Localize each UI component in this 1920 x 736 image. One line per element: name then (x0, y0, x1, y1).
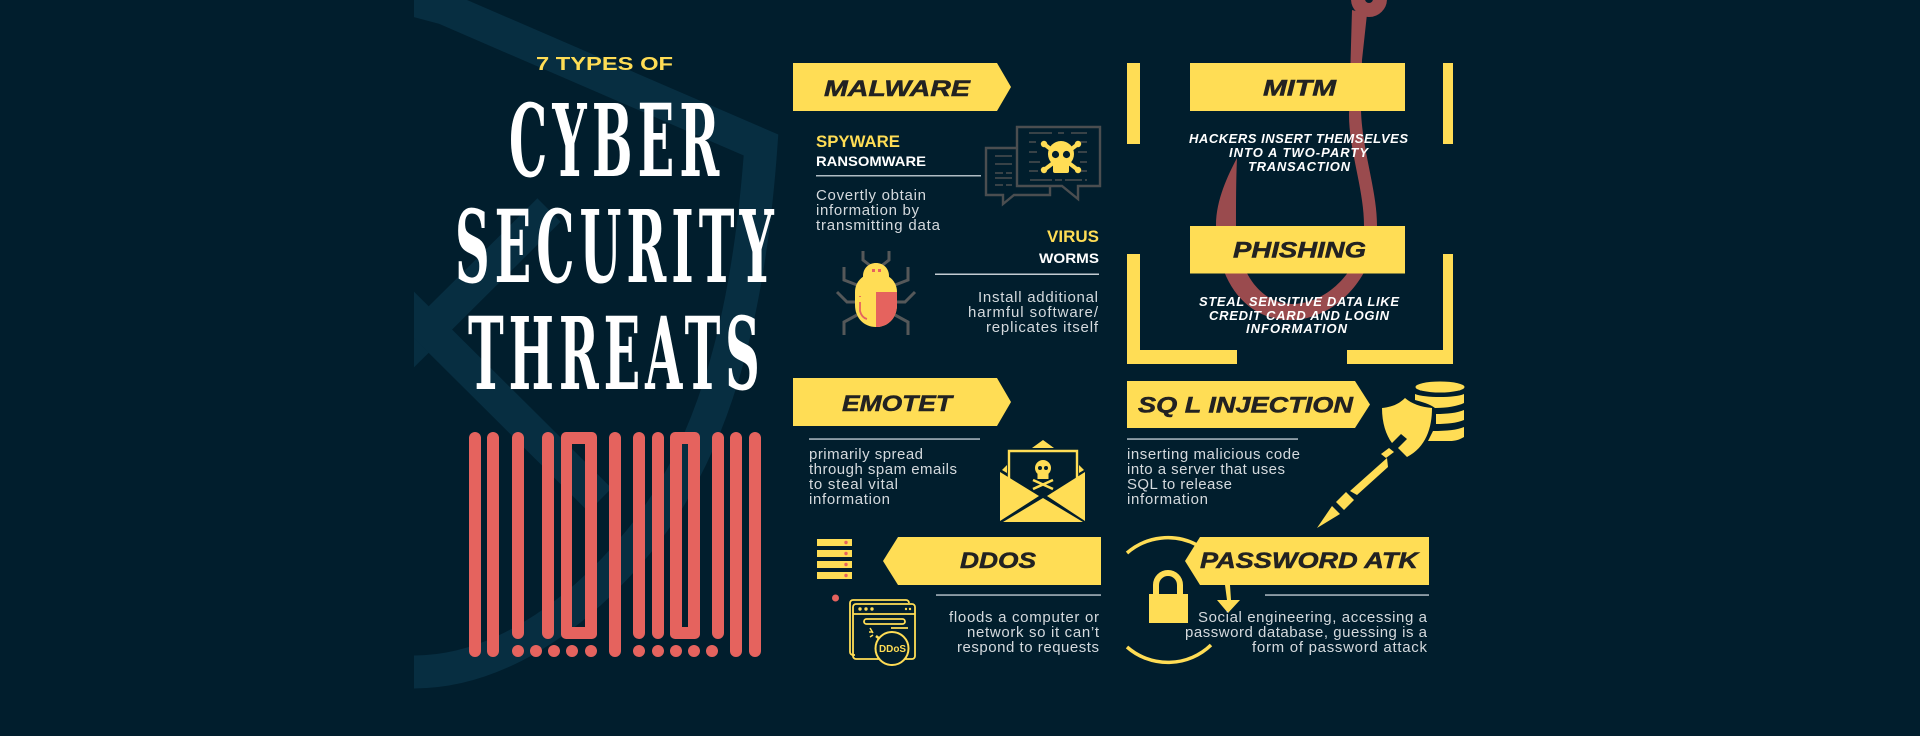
text block: virus and worms: VIRUS (1047, 227, 1099, 246)
panel: password attack (1127, 537, 1429, 662)
icon: ddos browser with bomb (850, 600, 915, 665)
panel: malware (793, 63, 1100, 336)
text block: password description (1185, 594, 1429, 656)
text block: virus and worms (935, 227, 1099, 336)
icon: padlock in arcs (1127, 538, 1211, 662)
tag: sql injection: SQ L INJECTION (1138, 392, 1354, 418)
text block: emotet description: to steal vital (809, 476, 898, 493)
text block: phishing description: CREDIT CARD AND LOGIN (1209, 308, 1390, 323)
text block: spyware and ransomware (816, 132, 981, 234)
text block: ddos description (936, 594, 1101, 656)
text block: mitm description: HACKERS INSERT THEMSELVES (1189, 131, 1408, 146)
text block: mitm description: INTO A TWO-PARTY (1229, 145, 1369, 160)
icon: barcode (469, 432, 761, 657)
icon: bug (837, 251, 915, 335)
title line: security: SECURITY (455, 189, 774, 306)
text block: emotet description (809, 438, 980, 508)
text block: virus and worms: replicates itself (986, 319, 1099, 336)
text block: sql description: inserting malicious code (1127, 446, 1300, 463)
text block: spyware and ransomware: Covertly obtain (816, 187, 926, 204)
tag: malware: MALWARE (824, 76, 972, 101)
background shield watermark (400, 0, 761, 672)
text block: virus and worms: Install additional (978, 289, 1098, 306)
tag: phishing: PHISHING (1233, 238, 1366, 262)
tag: mitm (1190, 63, 1405, 111)
text block: sql description: SQL to release (1127, 476, 1232, 493)
panel: mitm (1189, 63, 1408, 174)
title line: threats: THREATS (468, 296, 760, 413)
text block: emotet description: information (809, 491, 890, 508)
icon: database, shield and needle (1317, 382, 1464, 528)
text block: ddos description: network so it can’t (967, 624, 1100, 641)
tag: ddos (883, 537, 1101, 585)
icon: envelope with skull (1000, 440, 1085, 522)
text block: sql description (1127, 438, 1300, 508)
tag: mitm: MITM (1263, 76, 1337, 100)
text block: phishing description: STEAL SENSITIVE DATA LIKE (1199, 294, 1399, 309)
panel: phishing (1190, 226, 1405, 336)
panel: sql injection (1127, 381, 1464, 528)
text block: ddos description: respond to requests (957, 639, 1099, 656)
text block: password description: form of password attack (1252, 639, 1428, 656)
icon: ddos browser with bomb: DDoS (879, 644, 906, 655)
text block: mitm description: TRANSACTION (1248, 159, 1351, 174)
tag: password atk (1185, 537, 1429, 585)
text block: emotet description: primarily spread (809, 446, 923, 463)
text block: sql description: information (1127, 491, 1208, 508)
text block: emotet description: through spam emails (809, 461, 957, 478)
arrow: password tag to text (1217, 585, 1240, 613)
title line: cyber: CYBER (509, 83, 720, 200)
text block: spyware and ransomware: information by (816, 202, 920, 219)
tag: sql injection (1127, 381, 1370, 428)
text block: virus and worms: harmful software/ (968, 304, 1099, 321)
red dot (832, 594, 839, 602)
text block: spyware and ransomware: transmitting data (816, 217, 941, 234)
tag: ddos: DDOS (960, 548, 1036, 573)
icon: server stack (817, 539, 852, 579)
text block: spyware and ransomware: SPYWARE (816, 132, 900, 151)
text block: spyware and ransomware: RANSOMWARE (816, 153, 926, 169)
text block: password description: password database, guessing is a (1185, 624, 1428, 641)
text block: ddos description: floods a computer or (949, 609, 1099, 626)
panel: ddos (817, 537, 1101, 665)
subtitle: 7 TYPES OF (536, 54, 673, 74)
frame brackets (1127, 63, 1453, 364)
tag: malware (793, 63, 1011, 111)
text block: phishing description (1199, 294, 1399, 336)
infographic canvas (414, 0, 1464, 688)
left column title block (455, 54, 774, 413)
tag: emotet: EMOTET (842, 391, 954, 416)
tag: password atk: PASSWORD ATK (1200, 548, 1421, 573)
tag: emotet (793, 378, 1011, 426)
icon: fishing hook (1216, 0, 1380, 320)
text block: virus and worms: WORMS (1039, 250, 1099, 266)
text block: phishing description: INFORMATION (1246, 321, 1348, 336)
text block: sql description: into a server that uses (1127, 461, 1285, 478)
panel: emotet (793, 378, 1085, 522)
text block: mitm description (1189, 131, 1408, 174)
text block: password description: Social engineering, accessing a (1198, 609, 1428, 626)
icon: chat bubbles with skull (986, 127, 1100, 204)
tag: phishing (1190, 226, 1405, 274)
